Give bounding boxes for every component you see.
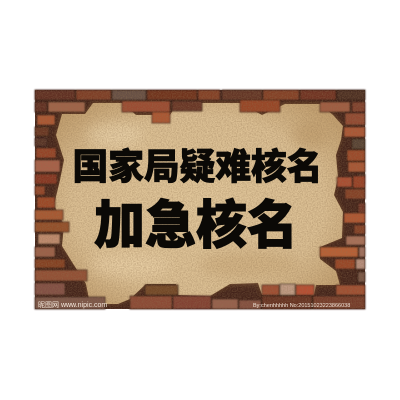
brick wall background	[35, 90, 365, 309]
watermark: right: By:chenhhhhh No:20151023223866038	[253, 303, 350, 309]
texture: grain overlay	[35, 90, 365, 309]
watermark: left: 昵图网 www.nipic.com	[38, 301, 107, 309]
bricks: bottom edge	[130, 284, 365, 309]
bricks: left edge	[35, 102, 105, 309]
heading: 加急核名: 加急核名	[94, 198, 298, 256]
bricks: top edge	[35, 90, 365, 123]
heading: 国家局疑难核名: 国家局疑难核名	[72, 146, 322, 187]
paper panel	[54, 102, 343, 304]
bricks: right edge	[320, 113, 365, 282]
